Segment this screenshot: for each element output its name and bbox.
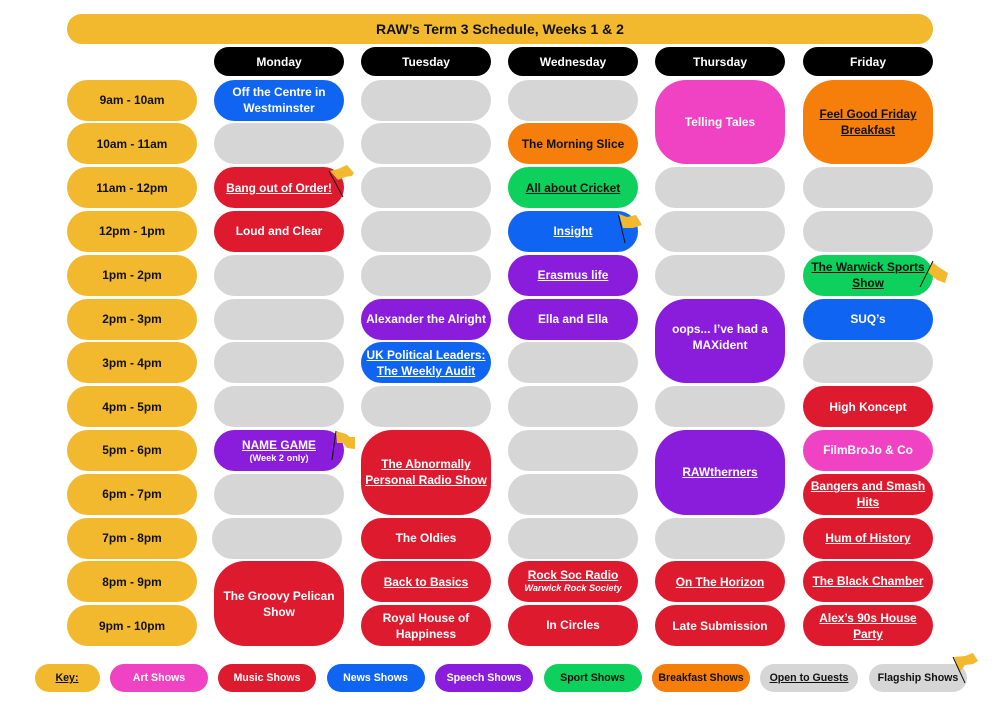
show: UK Political Leaders: UK Political Leaders: [367, 348, 485, 362]
show: Ella and Ella: Ella and Ella [538, 312, 608, 326]
show: Bangers and Smash Hits: Bangers and Smash [811, 479, 925, 493]
show: The Groovy Pelican Show: Show [263, 605, 295, 619]
show: Ella and Ella [508, 298, 638, 340]
legend: Music Shows [218, 664, 316, 692]
legend: Speech Shows: Speech Shows [447, 672, 521, 684]
show: Royal House of Happiness [361, 605, 491, 646]
show: The Groovy Pelican Show: The Groovy Pelican [223, 589, 335, 603]
open slot [508, 474, 638, 515]
time: 12pm [67, 211, 197, 252]
show: The Morning Slice [508, 123, 638, 164]
time: 10am: 10am - 11am [97, 137, 167, 151]
show: Alex's 90s House Party [803, 605, 933, 646]
show: Feel Good Friday Breakfast [803, 80, 933, 164]
title [67, 14, 933, 44]
show: RAWtherners: RAWtherners [682, 465, 758, 479]
open slot [803, 167, 933, 208]
day header: Monday: Monday [256, 54, 302, 68]
open slot [361, 386, 491, 427]
open slot [214, 255, 344, 296]
show: On The Horizon: On The Horizon [676, 575, 764, 589]
time: 4pm [67, 386, 197, 427]
show: Back to Basics [361, 561, 491, 602]
legend: Speech Shows [435, 664, 533, 692]
open slot [508, 342, 638, 383]
day header: Monday [214, 47, 344, 76]
show: Hum of History: Hum of History [825, 531, 911, 545]
time: 11am: 11am - 12pm [96, 181, 168, 195]
show: The Morning Slice: The Morning Slice [522, 137, 624, 151]
show: The Abnormally Personal Radio Show [361, 430, 491, 515]
time: 6pm: 6pm - 7pm [102, 487, 162, 501]
show: Bang out of Order [214, 167, 344, 208]
open slot [212, 518, 342, 558]
open slot [361, 80, 491, 120]
open slot [214, 298, 344, 340]
open slot [655, 211, 785, 252]
show: Alex's 90s House Party: Alex’s 90s House [819, 611, 917, 625]
day header: Wednesday: Wednesday [540, 54, 606, 68]
time: 3pm [67, 342, 197, 383]
icon: flag on Insight [618, 214, 642, 244]
time: 9pm: 9pm - 10pm [99, 619, 165, 633]
show: oops... I've had a MAXident: oops... I’ve had a [672, 322, 768, 336]
show: The Abnormally Personal Radio Show: The Abnormally [381, 457, 471, 471]
legend: Flagship Shows [869, 664, 967, 692]
show: Telling Tales [655, 80, 785, 164]
title: RAW’s Term 3 Schedule, Weeks 1 & 2 [376, 21, 624, 37]
show: Alexander the Alright: Alexander the Alright [366, 312, 486, 326]
legend: Open to Guests: Open to Guests [770, 672, 848, 684]
show: NAME GAME: (Week 2 only) [249, 453, 309, 463]
legend: Music Shows: Music Shows [233, 672, 301, 684]
show: Off the Centre in Westminster [214, 80, 344, 120]
day header: Tuesday: Tuesday [402, 54, 450, 68]
show: Alexander the Alright [361, 298, 491, 340]
open slot [655, 167, 785, 208]
show: Royal House of Happiness: Royal House of [383, 611, 469, 625]
time: 8pm: 8pm - 9pm [102, 575, 162, 589]
time: 5pm [67, 430, 197, 471]
show: FilmBroJo & Co [803, 430, 933, 471]
open slot [655, 518, 785, 558]
show: On The Horizon [655, 561, 785, 602]
show: UK Political Leaders: The Weekly Audit [377, 364, 475, 378]
show: The Warwick Sports Show: Show [852, 276, 884, 290]
open slot [361, 211, 491, 252]
key label [34, 664, 100, 692]
open slot [214, 123, 344, 164]
open slot [655, 255, 785, 296]
time: 12pm: 12pm - 1pm [99, 224, 165, 238]
show: High Koncept: High Koncept [829, 400, 907, 414]
show: The Abnormally Personal Radio Show: Personal Radio Show [365, 473, 487, 487]
show: In Circles [508, 605, 638, 646]
legend: Open to Guests [760, 664, 858, 692]
show: Bangers and Smash Hits: Hits [857, 495, 879, 509]
show: The Warwick Sports Show [803, 255, 933, 296]
key label: Key: [56, 672, 78, 684]
show: Telling Tales: Telling Tales [685, 115, 755, 129]
panel: Thursday column [655, 80, 785, 646]
show: The Black Chamber: The Black Chamber [812, 574, 924, 588]
open slot [214, 474, 344, 515]
time: 8pm [67, 561, 197, 602]
show: Off the Centre in Westminster: Off the Centre in [232, 85, 326, 99]
panel: Tuesday column [361, 80, 491, 646]
time: 9pm [67, 605, 197, 646]
time: 10am [67, 123, 197, 164]
show: Royal House of Happiness: Happiness [396, 627, 456, 641]
time: 4pm: 4pm - 5pm [102, 400, 162, 414]
open slot [508, 518, 638, 558]
show: Rock Soc Radio [508, 561, 638, 602]
show: RAWtherners [655, 430, 785, 515]
legend: Sport Shows: Sport Shows [560, 672, 625, 684]
time: 3pm: 3pm - 4pm [102, 356, 162, 370]
show: The Black Chamber [803, 561, 933, 602]
show: Erasmus life: Erasmus life [538, 268, 608, 282]
open slot [655, 386, 785, 427]
show: Bangers and Smash Hits [803, 474, 933, 515]
show: Feel Good Friday Breakfast: Feel Good Friday [819, 107, 917, 121]
show: Loud and Clear [214, 211, 344, 252]
day header: Wednesday [508, 47, 638, 76]
icon: flag on NAME GAME [332, 430, 355, 460]
open slot [361, 167, 491, 208]
show: In Circles: In Circles [546, 618, 600, 632]
show: Rock Soc Radio: Rock Soc Radio [528, 568, 618, 582]
show: Erasmus life [508, 255, 638, 296]
show: NAME GAME [214, 430, 344, 471]
show: NAME GAME: NAME GAME [242, 438, 316, 452]
time: 5pm: 5pm - 6pm [102, 443, 162, 457]
open slot [803, 211, 933, 252]
show: Late Submission [655, 605, 785, 646]
show: The Groovy Pelican Show [214, 561, 344, 646]
show: Insight [508, 211, 638, 252]
day header: Tuesday [361, 47, 491, 76]
day header: Friday [803, 47, 933, 76]
legend: News Shows [326, 664, 424, 692]
time: 1pm [67, 255, 197, 296]
open slot [361, 255, 491, 296]
open slot [214, 386, 344, 427]
legend: Breakfast Shows [652, 664, 750, 692]
day header: Thursday [655, 47, 785, 76]
time: 7pm: 7pm - 8pm [102, 531, 162, 545]
legend: Flagship Shows: Flagship Shows [878, 672, 958, 684]
open slot [214, 342, 344, 383]
show: Insight: Insight [554, 224, 592, 238]
show: The Warwick Sports Show: The Warwick Sports [811, 260, 925, 274]
legend: Art Shows: Art Shows [133, 672, 185, 684]
icon: flag on Bang out of Order [328, 165, 354, 198]
time: 2pm [67, 298, 197, 340]
time: 6pm [67, 474, 197, 515]
time: 9am [67, 80, 197, 120]
panel: Monday column [212, 80, 344, 646]
time column [67, 80, 197, 646]
show: Rock Soc Radio: Warwick Rock Society [524, 583, 622, 593]
show: Hum of History [803, 518, 933, 558]
show: The Oldies: The Oldies [396, 531, 456, 545]
panel: Friday column [803, 80, 933, 646]
show: Back to Basics: Back to Basics [384, 575, 468, 589]
open slot [508, 430, 638, 471]
show: Off the Centre in Westminster: Westminster [243, 101, 315, 115]
time: 2pm: 2pm - 3pm [102, 312, 162, 326]
time: 9am: 9am - 10am [100, 93, 164, 107]
show: High Koncept [803, 386, 933, 427]
show: Loud and Clear: Loud and Clear [236, 224, 322, 238]
legend [35, 653, 978, 692]
time: 11am [67, 167, 197, 208]
show: All about Cricket [508, 167, 638, 208]
panel: Wednesday column [508, 80, 638, 646]
show: The Oldies [361, 518, 491, 558]
time: 7pm [67, 518, 197, 558]
show: oops... I've had a MAXident: MAXident [693, 338, 747, 352]
show: Feel Good Friday Breakfast: Breakfast [841, 123, 895, 137]
legend: News Shows: News Shows [343, 672, 408, 684]
open slot [508, 386, 638, 427]
icon: flag on The Warwick Sports Show [920, 260, 948, 288]
show: SUQ's [803, 298, 933, 340]
show: Bang out of Order: Bang out of Order! [226, 181, 332, 195]
show: UK Political Leaders [361, 342, 491, 383]
show: All about Cricket: All about Cricket [526, 181, 620, 195]
show: SUQ's: SUQ’s [850, 312, 886, 326]
open slot [803, 342, 933, 383]
legend: Breakfast Shows: Breakfast Shows [658, 672, 744, 684]
open slot [361, 123, 491, 164]
time: 1pm: 1pm - 2pm [102, 268, 162, 282]
day header: Friday: Friday [850, 54, 886, 68]
legend: Sport Shows [544, 664, 642, 692]
legend: Art Shows [110, 664, 208, 692]
show: Alex's 90s House Party: Party [853, 627, 883, 641]
show: Late Submission: Late Submission [672, 619, 768, 633]
show: oops... I've had a MAXident [655, 298, 785, 383]
day header: Thursday: Thursday [693, 54, 747, 68]
show: FilmBroJo & Co: FilmBroJo & Co [823, 443, 913, 457]
open slot [508, 80, 638, 120]
icon: flag on Flagship Shows legend [952, 653, 978, 684]
